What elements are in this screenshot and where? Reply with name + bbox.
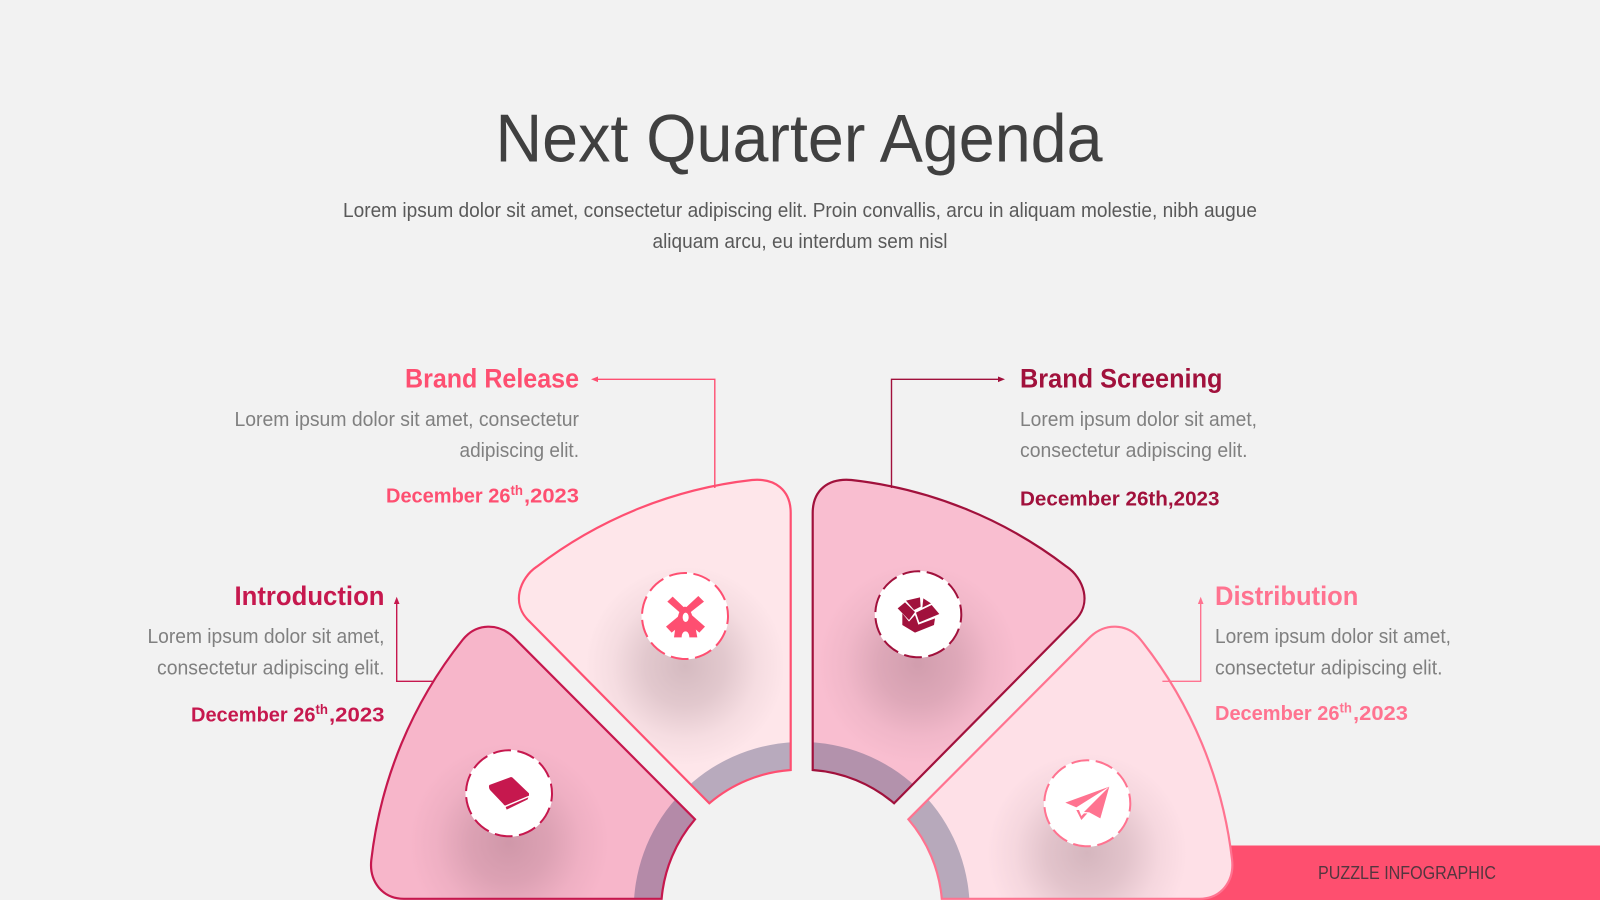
footer banner bbox=[1190, 846, 1600, 900]
text block: brand release: ,2023 bbox=[524, 485, 579, 508]
text block: brand release: Brand Release bbox=[405, 363, 579, 393]
text block: distribution: ,2023 bbox=[1353, 702, 1408, 725]
text block: introduction: Introduction bbox=[234, 581, 384, 611]
text block: distribution: consectetur adipiscing elit. bbox=[1215, 657, 1442, 680]
icon: box bbox=[873, 569, 963, 659]
text block: distribution: Lorem ipsum dolor sit amet, bbox=[1215, 625, 1451, 648]
subtitle bbox=[343, 199, 1257, 253]
text block: brand release: December 26 bbox=[386, 485, 510, 508]
text block: brand screening: Lorem ipsum dolor sit amet, bbox=[1020, 408, 1257, 431]
text block: brand release: Lorem ipsum dolor sit amet, consectetur bbox=[234, 408, 579, 431]
arrow: distribution connector bbox=[1162, 597, 1204, 681]
arrow: brand screening connector bbox=[892, 376, 1005, 488]
text block: brand release: th bbox=[510, 483, 523, 498]
text block: brand screening: Brand Screening bbox=[1020, 363, 1222, 393]
icon: windmill bbox=[640, 571, 730, 661]
text block: brand screening bbox=[1020, 363, 1257, 511]
text block: introduction: December 26 bbox=[191, 704, 316, 727]
icon: book bbox=[464, 748, 554, 838]
text block: introduction: th bbox=[316, 702, 328, 717]
text block: brand screening: December 26th,2023 bbox=[1020, 488, 1220, 511]
text block: distribution: th bbox=[1340, 700, 1352, 716]
text block: brand release bbox=[234, 363, 579, 508]
panel: introduction segment bbox=[370, 626, 696, 900]
title: Next Quarter Agenda bbox=[496, 100, 1103, 176]
text block: brand release: adipiscing elit. bbox=[460, 439, 579, 462]
text block: brand screening: consectetur adipiscing elit. bbox=[1020, 439, 1248, 462]
panel: distribution segment bbox=[907, 626, 1234, 900]
subtitle: aliquam arcu, eu interdum sem nisl bbox=[652, 230, 948, 253]
footer banner: PUZZLE INFOGRAPHIC bbox=[1318, 863, 1496, 883]
subtitle: Lorem ipsum dolor sit amet, consectetur adipiscing elit. Proin convallis, arcu in aliquam molestie, nibh augue bbox=[343, 199, 1257, 222]
icon: paper plane bbox=[1042, 758, 1132, 848]
arrow: brand release connector bbox=[591, 376, 715, 488]
text block: introduction: consectetur adipiscing elit. bbox=[157, 657, 384, 680]
text block: distribution bbox=[1215, 581, 1451, 725]
arrow: introduction connector bbox=[394, 597, 434, 681]
text block: introduction: Lorem ipsum dolor sit amet, bbox=[148, 625, 384, 648]
text block: introduction bbox=[148, 581, 384, 727]
text block: introduction: ,2023 bbox=[329, 704, 384, 727]
text block: distribution: December 26 bbox=[1215, 702, 1340, 725]
panel: brand screening segment bbox=[812, 478, 1086, 805]
text block: distribution: Distribution bbox=[1215, 581, 1358, 611]
panel: brand release segment bbox=[518, 478, 792, 805]
